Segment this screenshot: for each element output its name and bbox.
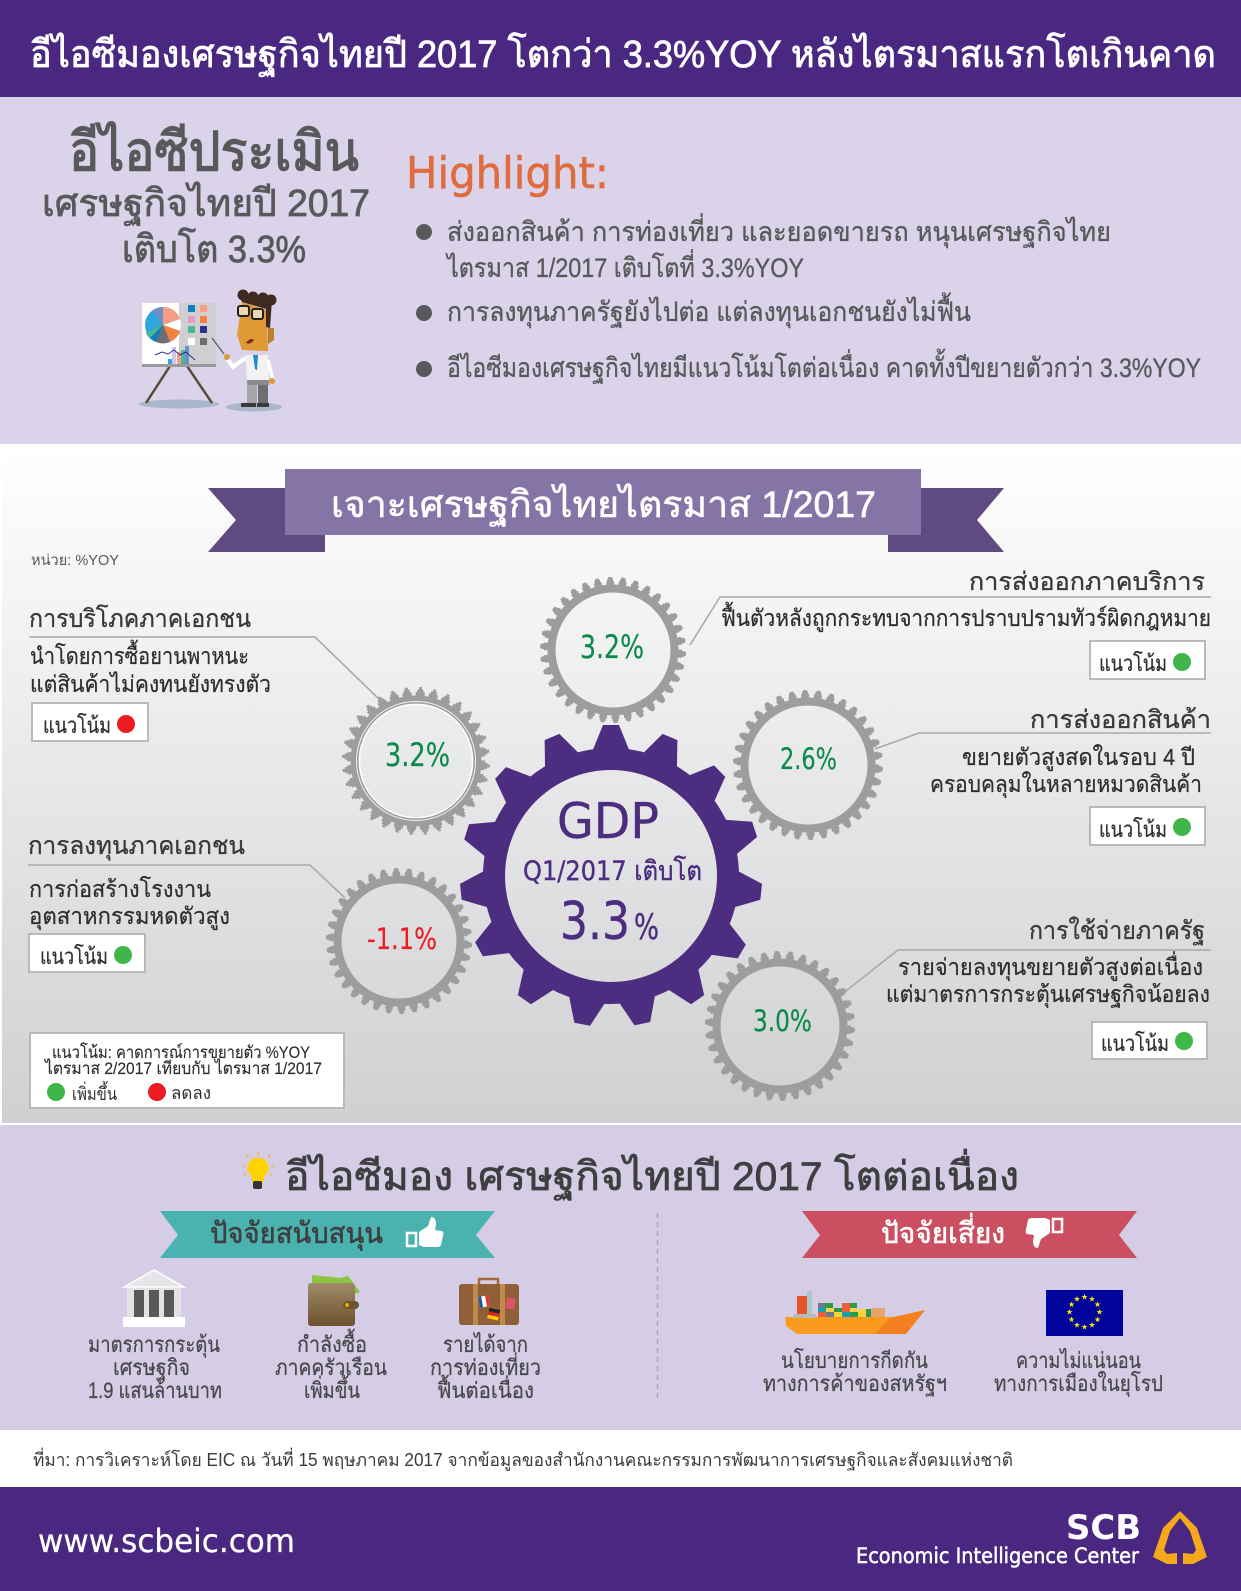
factor: household purchasing power: เพิ่มขึ้น [304, 1375, 360, 1403]
ribbon: risk factors [802, 1211, 1137, 1258]
factor: stimulus: เศรษฐกิจ [113, 1355, 190, 1381]
brand name: SCB [1066, 1508, 1141, 1548]
icon: container ship [785, 1291, 925, 1334]
factor: European politics: ความไม่แน่นอน [1016, 1348, 1141, 1373]
factor: tourism income [430, 1279, 541, 1403]
factor: European politics [994, 1290, 1163, 1397]
callout: service exports: แนวโน้ม [1099, 651, 1167, 676]
icon: SCB logo [1153, 1511, 1207, 1564]
callout: private consumption: แต่สินค้าไม่คงทนยังทรงตัว [30, 671, 271, 697]
gear: service exports 3.2%: 3.2% [580, 628, 644, 666]
gear: service exports 3.2% [541, 578, 685, 722]
brand name: Economic Intelligence Center [856, 1544, 1139, 1568]
callout: government spending [842, 916, 1211, 1059]
factor: household purchasing power [275, 1275, 387, 1403]
factor: stimulus [88, 1270, 222, 1403]
icon: EU flag [1046, 1290, 1123, 1336]
section heading: อีไอซีมอง เศรษฐกิจไทยปี 2017 โตต่อเนื่อง [285, 1149, 1019, 1201]
panel: 2017 outlook [0, 1125, 1241, 1430]
panel: GDP breakdown [0, 444, 1241, 1125]
callout: goods exports [875, 706, 1211, 845]
bullet 1: ส่งออกสินค้า การท่องเที่ยว และยอดขายรถ หนุนเศรษฐกิจไทย [447, 213, 1111, 249]
callout: government spending: แนวโน้ม [1101, 1031, 1169, 1056]
section banner: เจาะเศรษฐกิจไทยไตรมาส 1/2017 [331, 483, 876, 527]
callout: service exports [690, 568, 1211, 679]
section banner [208, 469, 1004, 552]
factor: tourism income: รายได้จาก [443, 1332, 528, 1357]
left heading: อีไอซีประเมิน [69, 121, 359, 182]
ribbon: risk factors: ปัจจัยเสี่ยง [881, 1213, 1005, 1250]
title: อีไอซีมองเศรษฐกิจไทยปี 2017 โตกว่า 3.3%YOY หลังไตรมาสแรกโตเกินคาด [30, 32, 1216, 77]
callout: private investment: แนวโน้ม [40, 944, 108, 969]
callout: government spending: การใช้จ่ายภาครัฐ [1029, 916, 1205, 945]
gear: government spending 3.0%: 3.0% [753, 1004, 812, 1038]
main gear: GDP 3.3%: GDP [557, 793, 659, 850]
ribbon: supporting factors [160, 1211, 495, 1258]
bullet 1: ไตรมาส 1/2017 เติบโตที่ 3.3%YOY [445, 249, 804, 283]
legend: ลดลง [171, 1083, 211, 1103]
factor: US trade protectionism: นโยบายการกีดกัน [781, 1348, 928, 1373]
factor: stimulus: มาตรการกระตุ้น [88, 1332, 220, 1358]
factor: European politics: ทางการเมืองในยุโรป [994, 1371, 1163, 1397]
unit note: หน่วย: %YOY [31, 552, 119, 569]
icon: thumbs up [407, 1217, 443, 1247]
gear: goods exports 2.6% [734, 691, 882, 839]
callout: private consumption: แนวโน้ม [43, 713, 111, 738]
main gear: GDP 3.3% [459, 725, 763, 1028]
ribbon: supporting factors: ปัจจัยสนับสนุน [210, 1218, 383, 1251]
factor: US trade protectionism [763, 1291, 947, 1397]
panel: highlight summary [0, 97, 1241, 444]
factor: tourism income: ฟื้นต่อเนื่อง [437, 1375, 534, 1403]
callout: private consumption: นำโดยการซื้อยานพาหนะ [30, 640, 249, 669]
icon: bank [123, 1270, 185, 1327]
factor: stimulus: 1.9 แสนล้านบาท [88, 1378, 222, 1403]
callout: goods exports: การส่งออกสินค้า [1030, 706, 1211, 734]
factor: household purchasing power: กำลังซื้อ [297, 1329, 367, 1357]
main gear: GDP 3.3%: 3.3 [560, 892, 630, 952]
callout: goods exports: แนวโน้ม [1099, 817, 1167, 842]
legend [30, 1033, 344, 1108]
gear: private consumption 3.2%: 3.2% [385, 736, 450, 774]
icon: thumbs down [1026, 1218, 1062, 1248]
callout: private investment: อุตสาหกรรมหดตัวสูง [29, 903, 230, 930]
left heading: เศรษฐกิจไทยปี 2017 [42, 182, 370, 226]
highlight heading: Highlight: [406, 148, 609, 199]
legend: ไตรมาส 2/2017 เทียบกับ ไตรมาส 1/2017 [43, 1058, 322, 1078]
gear: goods exports 2.6%: 2.6% [780, 742, 837, 776]
gear: private investment -1.1% [327, 869, 471, 1013]
header band [0, 0, 1241, 97]
icon: light bulb [243, 1152, 274, 1189]
gear: private consumption 3.2% [344, 688, 488, 834]
brand name [856, 1508, 1141, 1568]
callout: private consumption [29, 604, 380, 741]
left heading [42, 121, 370, 271]
callout: private consumption: การบริโภคภาคเอกชน [29, 604, 251, 633]
callout: private investment: การก่อสร้างโรงงาน [29, 876, 211, 902]
main gear: GDP 3.3%: Q1/2017 เติบโต [523, 856, 702, 887]
icon: suitcase [459, 1279, 519, 1325]
icon: presenter with easel [139, 290, 282, 412]
callout: government spending: แต่มาตรการกระตุ้นเศรษฐกิจน้อยลง [886, 981, 1210, 1008]
callout: private investment: การลงทุนภาคเอกชน [28, 832, 245, 861]
source note: ที่มา: การวิเคราะห์โดย EIC ณ วันที่ 15 พฤษภาคม 2017 จากข้อมูลของสำนักงานคณะกรรมการพัฒนาการเศรษฐกิจและสังคมแห่งชาติ [33, 1447, 1013, 1471]
gear: private investment -1.1%: -1.1% [367, 922, 437, 956]
legend: เพิ่มขึ้น [72, 1081, 117, 1104]
gear: government spending 3.0% [706, 952, 854, 1100]
callout: goods exports: ขยายตัวสูงสดในรอบ 4 ปี [962, 744, 1195, 771]
callout: private investment [28, 832, 345, 972]
factor: household purchasing power: ภาคครัวเรือน [275, 1355, 387, 1380]
factor: tourism income: การท่องเที่ยว [430, 1352, 541, 1380]
main gear: GDP 3.3%: % [634, 908, 659, 948]
icon: wallet [308, 1275, 360, 1326]
left heading: เติบโต 3.3% [122, 227, 306, 271]
legend: แนวโน้ม: คาดการณ์การขยายตัว %YOY [52, 1042, 310, 1062]
website: www.scbeic.com [38, 1522, 295, 1560]
callout: service exports: การส่งออกภาคบริการ [969, 568, 1205, 596]
bullet 1 [416, 213, 1111, 283]
footer [0, 1487, 1241, 1591]
callout: government spending: รายจ่ายลงทุนขยายตัวสูงต่อเนื่อง [898, 951, 1203, 981]
callout: goods exports: ครอบคลุมในหลายหมวดสินค้า [930, 771, 1202, 798]
factor: US trade protectionism: ทางการค้าของสหรัฐฯ [763, 1371, 947, 1397]
bullet 2: การลงทุนภาครัฐยังไปต่อ แต่ลงทุนเอกชนยังไม่ฟื้น [447, 292, 971, 329]
